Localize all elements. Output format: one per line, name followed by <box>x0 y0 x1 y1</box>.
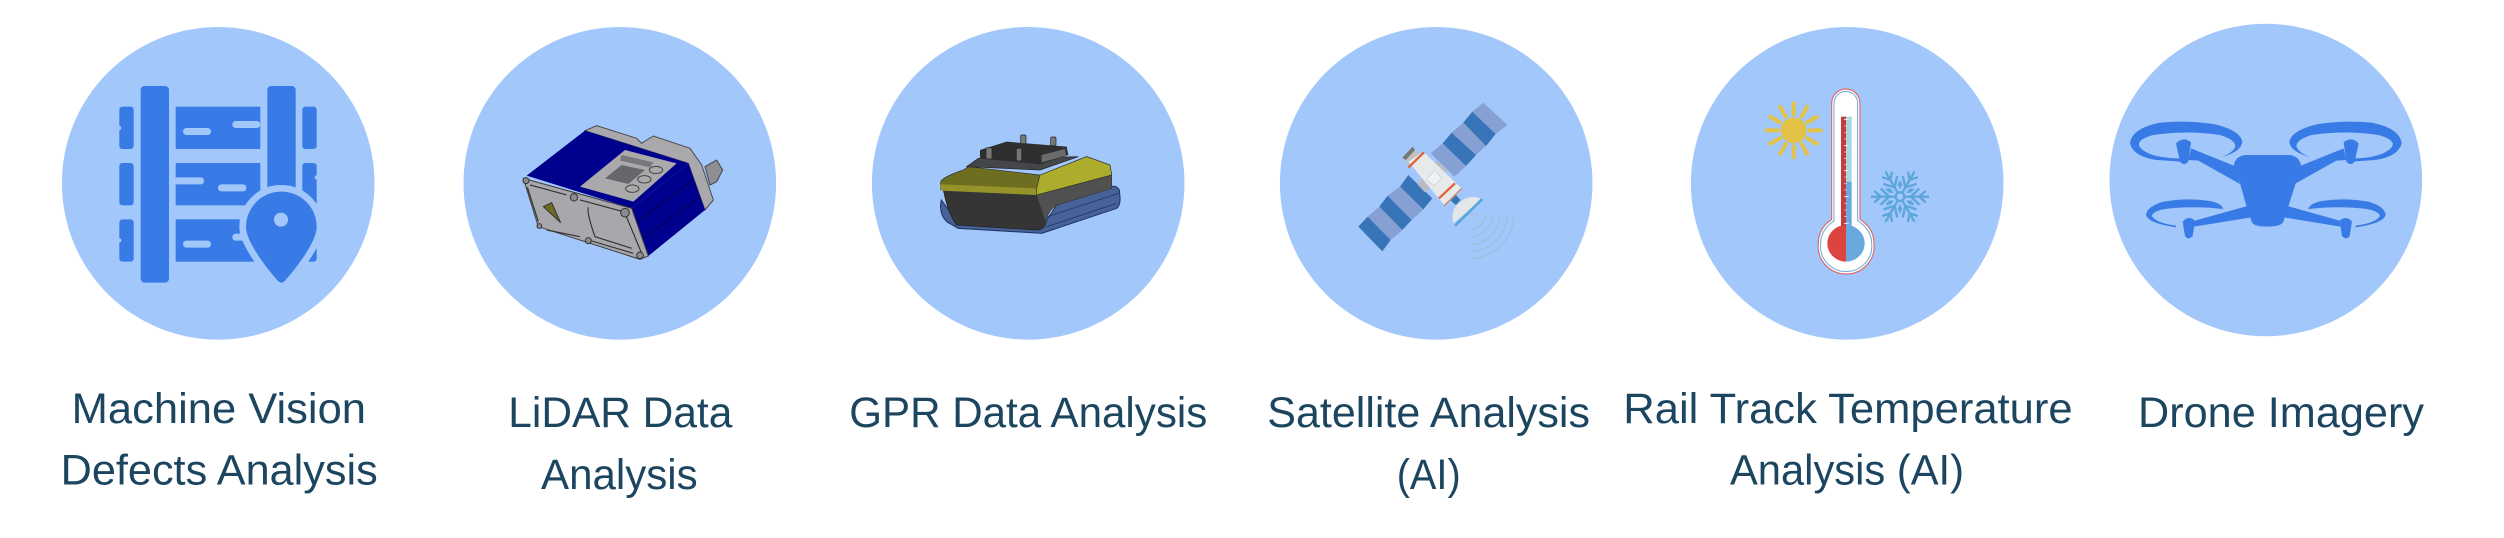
icon: ground penetrating radar unit <box>941 135 1120 233</box>
label: machine vision: Machine Vision <box>72 385 366 433</box>
panel: gpr data analysis <box>849 27 1207 437</box>
label: analysis: Analysis <box>541 451 698 499</box>
icon: rail track with location pin <box>117 86 319 283</box>
label: defects analysis: Defects Analysis <box>61 446 378 494</box>
icon: lidar sensor <box>523 126 723 259</box>
background circle: gpr <box>872 27 1184 340</box>
background circle: machine vision <box>62 27 374 340</box>
icon: thermometer with sun and snowflake <box>1765 89 1929 274</box>
icon: drone <box>2130 122 2402 238</box>
label: rail track temperature: Rail Track Temperature <box>1623 385 2073 433</box>
panel: machine vision defects analysis <box>61 27 378 494</box>
panel: lidar data analysis <box>464 27 776 499</box>
panel: drone imagery <box>2110 24 2424 437</box>
background circle: satellite <box>1280 27 1592 340</box>
label: satellite analysis: Satellite Analysis <box>1267 389 1590 437</box>
label: lidar data: LiDAR Data <box>508 389 732 437</box>
panel: satellite analysis <box>1267 27 1592 499</box>
label: analysis (AI): Analysis (AI) <box>1730 446 1964 494</box>
label: drone imagery: Drone Imagery <box>2138 389 2424 437</box>
label: (AI): (AI) <box>1397 451 1461 499</box>
panel: rail track temperature analysis <box>1623 27 2073 494</box>
label: gpr data analysis: GPR Data Analysis <box>849 389 1207 437</box>
background circle: lidar <box>464 27 776 340</box>
background circle: temperature <box>1691 27 2003 340</box>
icon: satellite <box>1358 103 1514 259</box>
background circle: drone <box>2110 24 2422 336</box>
